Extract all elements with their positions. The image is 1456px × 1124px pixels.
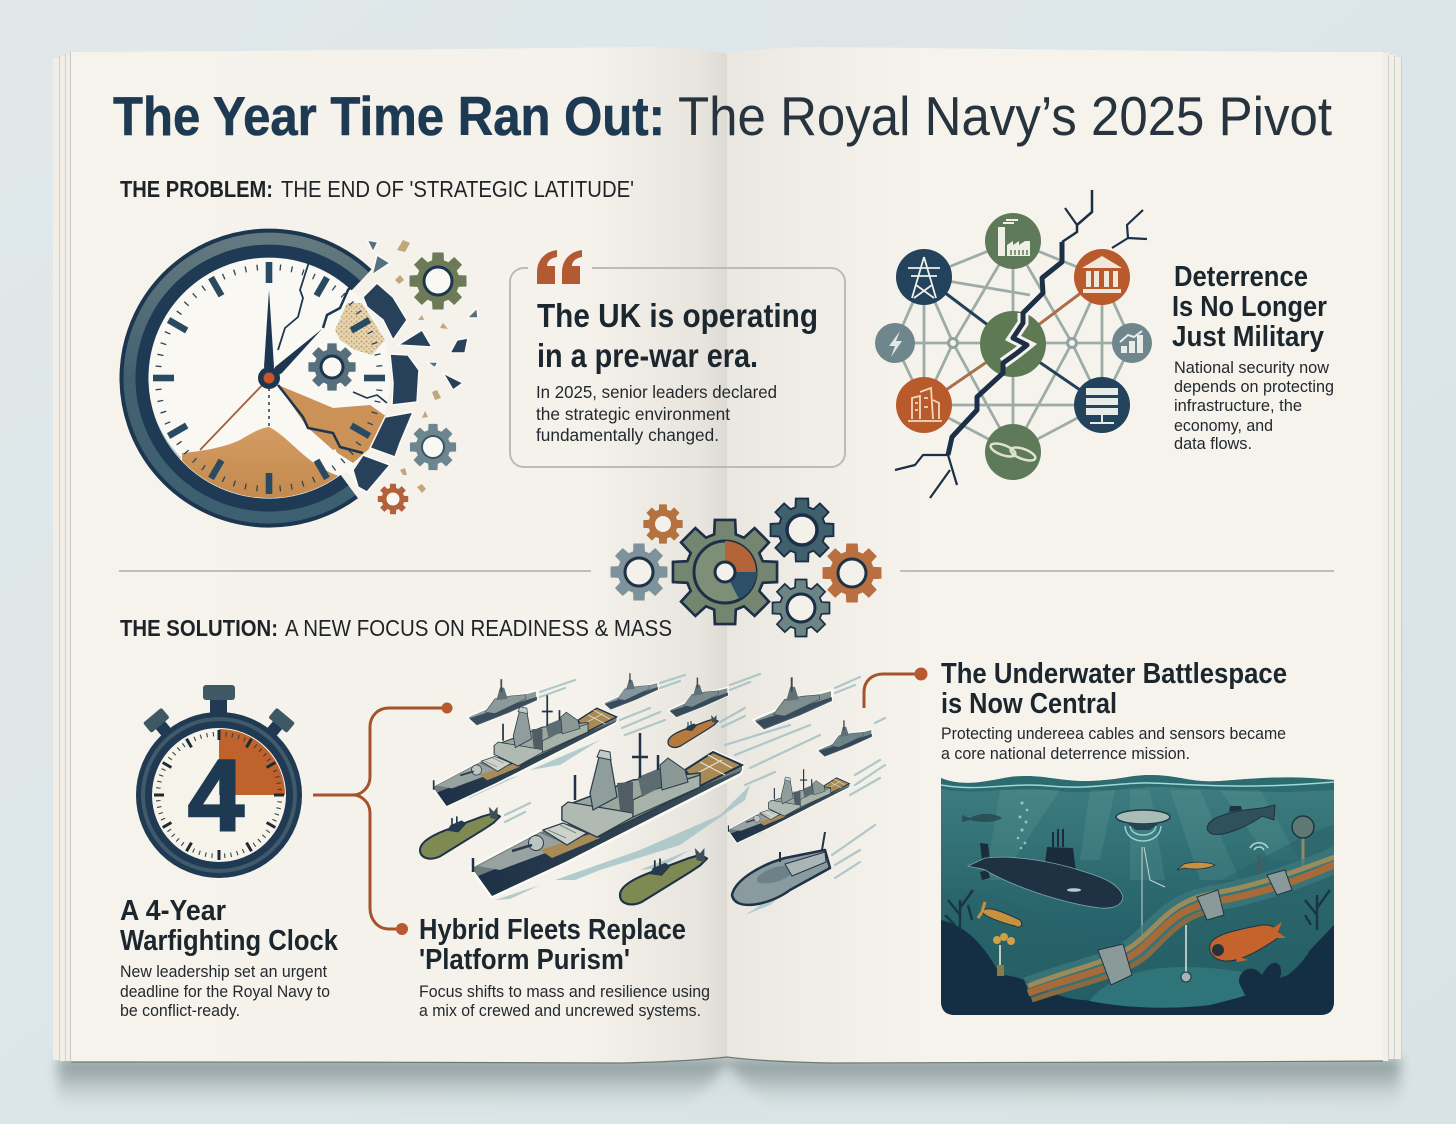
yellow drone fish bbox=[1177, 862, 1215, 870]
text: hybrid fleets: 'Platform Purism' bbox=[419, 944, 630, 976]
node: buildings bbox=[896, 377, 952, 433]
uncrewed boat bbox=[732, 832, 830, 905]
orange uncrewed vehicle bbox=[1210, 922, 1286, 962]
text: deterrence: Deterrence bbox=[1174, 261, 1308, 293]
text: underwater battlespace: is Now Central bbox=[941, 688, 1117, 720]
divider right bbox=[900, 570, 1334, 572]
heading: the solution subtitle: A NEW FOCUS ON READINESS & MASS bbox=[285, 615, 672, 641]
left page bbox=[71, 47, 727, 1063]
text: underwater battlespace: The Underwater Battlespace bbox=[941, 658, 1287, 690]
cable clamps bbox=[1098, 870, 1292, 985]
node: power bbox=[875, 323, 915, 363]
text: underwater battlespace: Protecting undereea cables and sensors became bbox=[941, 724, 1286, 743]
text: deterrence: infrastructure, the bbox=[1174, 396, 1302, 415]
quote body bbox=[536, 382, 777, 445]
node: chart bbox=[1112, 323, 1152, 363]
submarine: far bbox=[1207, 805, 1275, 834]
gear: inner slate bbox=[308, 343, 356, 391]
network edges bbox=[895, 241, 1132, 452]
right page bbox=[727, 47, 1383, 1063]
signal antenna bbox=[1250, 843, 1268, 885]
dashed pendulum line bbox=[268, 388, 270, 427]
clock hands bbox=[200, 290, 322, 450]
gear: big center bbox=[673, 520, 777, 624]
light pool below the spine bbox=[650, 1062, 800, 1124]
ship: frigate right bbox=[728, 769, 850, 843]
bubbles bbox=[1017, 801, 1028, 849]
submarine: olive small bbox=[420, 807, 500, 859]
right page stack bbox=[1383, 53, 1402, 1061]
drone with sonar bbox=[1116, 810, 1170, 935]
text: deterrence: Is No Longer bbox=[1172, 291, 1327, 323]
text: 4-year clock: A 4-Year bbox=[120, 895, 226, 927]
heading: the problem subtitle: THE END OF 'STRATEGIC LATITUDE' bbox=[281, 176, 634, 202]
case bbox=[144, 720, 294, 870]
fish bbox=[962, 814, 1002, 822]
quote body: fundamentally changed. bbox=[536, 425, 719, 445]
node: chain bbox=[985, 424, 1041, 480]
quote body: In 2025, senior leaders declared bbox=[536, 382, 777, 402]
node: bank bbox=[1074, 249, 1130, 305]
node: server bbox=[1074, 377, 1130, 433]
quote gap bbox=[528, 260, 592, 274]
icon: quotation mark bbox=[537, 250, 582, 284]
crack halo bbox=[1003, 313, 1027, 363]
text: 4-year clock: New leadership set an urgent bbox=[120, 962, 327, 981]
quote box bbox=[510, 250, 845, 467]
seabed sensor yellow bbox=[993, 933, 1015, 976]
text: hybrid fleets: a mix of crewed and uncrewed systems. bbox=[419, 1001, 701, 1020]
gear: slate bbox=[410, 424, 456, 470]
elapsed quarter bbox=[219, 729, 285, 795]
dark edges bbox=[924, 277, 1102, 405]
text: deterrence: National security now bbox=[1174, 358, 1330, 377]
central gears bbox=[611, 499, 881, 636]
cracks bbox=[278, 262, 387, 490]
quote headline: The UK is operating bbox=[537, 297, 818, 334]
ship: gray 3 bbox=[668, 678, 728, 717]
subsea cables bbox=[1028, 855, 1340, 1000]
ship: gray 2 bbox=[603, 673, 658, 710]
gear: small rust bbox=[643, 504, 683, 544]
tan fragments bbox=[395, 240, 448, 493]
text: deterrence: data flows. bbox=[1174, 434, 1252, 453]
illustration: broken clock bbox=[122, 231, 478, 525]
text: 4-year clock: Warfighting Clock bbox=[120, 925, 339, 957]
illustration: underwater scene bbox=[941, 770, 1340, 1020]
number four: 4 bbox=[188, 740, 244, 852]
sand flow bbox=[278, 385, 387, 463]
text: deterrence: depends on protecting bbox=[1174, 377, 1334, 396]
quote body: the strategic environment bbox=[536, 404, 730, 424]
node: pylon bbox=[896, 249, 952, 305]
gear: slate left bbox=[611, 544, 667, 600]
hour ticks bbox=[153, 262, 385, 494]
node: factory bbox=[985, 213, 1041, 269]
heading: the problem: THE PROBLEM: bbox=[120, 176, 273, 202]
sand pile bbox=[182, 427, 338, 498]
connector: clock to fleets bbox=[313, 702, 452, 935]
sand spill bbox=[335, 303, 385, 355]
text: hybrid fleets: Focus shifts to mass and resilience using bbox=[419, 982, 710, 1001]
torpedo drone: rust bbox=[668, 715, 718, 747]
text: 4-year clock bbox=[120, 895, 339, 1020]
text: deterrence bbox=[1172, 261, 1334, 453]
gear: slate bottom bbox=[773, 580, 829, 636]
main crack bbox=[895, 190, 1147, 498]
dark seabed bbox=[941, 920, 1334, 1015]
ship: gray 1 bbox=[467, 679, 537, 725]
title bbox=[113, 85, 1332, 147]
distant seabed bbox=[941, 825, 1334, 1015]
title: The Royal Navy’s 2025 Pivot bbox=[678, 85, 1332, 147]
divider left bbox=[119, 570, 591, 572]
stopwatch bbox=[143, 685, 295, 871]
dial bbox=[148, 257, 390, 499]
broken ring fragments bbox=[353, 240, 478, 492]
seaweed bbox=[945, 890, 1330, 930]
text: 4-year clock: be conflict-ready. bbox=[120, 1001, 240, 1020]
text: deterrence: Just Military bbox=[1172, 321, 1324, 353]
light rays bbox=[985, 790, 1300, 880]
text: hybrid fleets: Hybrid Fleets Replace bbox=[419, 914, 686, 946]
center node bbox=[980, 311, 1046, 377]
text: deterrence: economy, and bbox=[1174, 416, 1273, 435]
gear: olive bbox=[410, 253, 466, 309]
crown bbox=[203, 685, 235, 713]
seabed post bbox=[1181, 925, 1191, 982]
gear: navy bbox=[771, 499, 833, 561]
left page stack bbox=[53, 52, 72, 1062]
text: underwater battlespace bbox=[941, 658, 1287, 763]
dial inner shade bbox=[144, 248, 356, 459]
surface bbox=[941, 782, 1334, 788]
text: hybrid fleets bbox=[419, 914, 710, 1020]
heading: the solution: THE SOLUTION: bbox=[120, 615, 278, 641]
gear: rust bbox=[823, 544, 881, 602]
buoy sensor bbox=[1292, 816, 1314, 867]
rust edges bbox=[924, 277, 1102, 405]
junctions bbox=[948, 338, 1076, 348]
text: 4-year clock: deadline for the Royal Navy to bbox=[120, 982, 330, 1001]
gear: rust bbox=[378, 484, 408, 514]
illustration: hybrid fleet bbox=[420, 673, 885, 915]
shadow under book bbox=[58, 1058, 1400, 1114]
submarine: main bbox=[968, 829, 1123, 908]
tick marks bbox=[158, 734, 280, 856]
ship: frigate upper bbox=[433, 695, 617, 806]
text: underwater battlespace: a core national deterrence mission. bbox=[941, 744, 1190, 763]
submarine: olive large bbox=[620, 848, 707, 904]
yellow torpedo bbox=[978, 902, 1022, 927]
knobs bbox=[143, 708, 295, 743]
title: The Year Time Ran Out: bbox=[113, 85, 665, 147]
ship: gray 5 bbox=[817, 720, 872, 757]
ship: flagship bbox=[472, 733, 742, 896]
minute ticks bbox=[158, 267, 380, 489]
surface band bbox=[941, 775, 1334, 792]
clock ring bbox=[122, 231, 370, 525]
network diagram bbox=[875, 190, 1152, 498]
quote headline line 2: in a pre-war era. bbox=[537, 337, 758, 374]
wakes bbox=[505, 674, 885, 878]
connector: underwater bbox=[864, 668, 928, 708]
ship: gray 4 bbox=[753, 677, 832, 729]
coral bbox=[1239, 962, 1286, 995]
wake under big ship bbox=[445, 740, 800, 915]
